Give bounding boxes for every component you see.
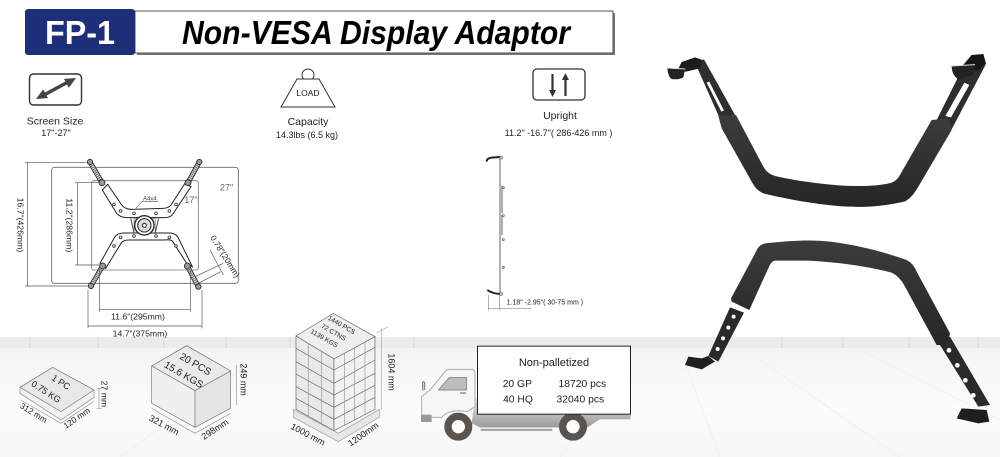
14.7 inch label: 14.7"(375mm): [113, 329, 167, 339]
pallet stack: [289, 313, 396, 448]
shipping quantity table: 20 GP: [503, 379, 532, 390]
main band: [718, 115, 952, 207]
right leg: [940, 337, 990, 407]
left clip: [667, 57, 703, 79]
model badge: [25, 9, 135, 55]
carton: 15.6 KGS: [162, 360, 205, 391]
shipping quantity table: 32040 pcs: [556, 395, 604, 406]
value: upright: 11.2" -16.7"( 286-426 mm ): [505, 128, 612, 138]
single unit box: 27 mm: [99, 381, 109, 407]
right arm: [937, 64, 986, 129]
single unit box: 120 mm: [61, 405, 92, 431]
shipping quantity table: [477, 346, 630, 414]
right clip: [952, 54, 986, 79]
11.6 inch label: 11.6"(295mm): [111, 311, 165, 321]
truck and container table: [421, 346, 631, 437]
main band: [731, 240, 950, 345]
pallet stack: 1604 mm: [386, 353, 396, 391]
single unit box: 1 PC: [50, 373, 73, 392]
single unit box: 312 mm: [18, 401, 49, 425]
floor background: [0, 337, 1000, 457]
pallet stack: 1200mm: [346, 420, 380, 448]
label: screen size: Screen Size: [27, 116, 83, 128]
packaging and shipping: [18, 313, 396, 448]
product photo: lower bracket: [685, 240, 990, 423]
label: upright: Upright: [543, 110, 577, 122]
shipping quantity table: Non-palletized: [519, 357, 589, 369]
product photo: upper bracket: [667, 54, 986, 207]
pallet stack: 72 CTNS: [320, 323, 347, 343]
bracket end knobs: [87, 159, 202, 289]
pallet stack: 1000 mm: [289, 421, 327, 448]
label: capacity: Capacity: [288, 116, 329, 128]
27 inch outline: [52, 167, 238, 283]
truck: [421, 369, 631, 437]
spec: capacity: [276, 69, 338, 140]
icon: load weight: LOAD: [296, 88, 320, 98]
carton: 249 mm: [239, 363, 249, 396]
carton: 298mm: [200, 417, 230, 442]
icon: up and down arrows: [533, 69, 585, 100]
single unit box: [18, 367, 109, 431]
icon: diagonal double arrow: [30, 74, 82, 105]
shipping quantity table: 18720 pcs: [558, 379, 606, 390]
value: capacity: 14.3lbs (6.5 kg): [276, 130, 338, 140]
size labels: 17": [184, 195, 198, 205]
front dimension drawing: [15, 159, 242, 339]
side bracket: [487, 156, 532, 311]
carton: [147, 346, 249, 442]
bracket holes: [113, 203, 177, 247]
single unit box: 0.75 KG: [30, 379, 63, 405]
size labels: [184, 183, 233, 205]
title text: Non-VESA Display Adaptor: [182, 14, 572, 51]
right foot: [957, 408, 989, 423]
16.7 inch label: 16.7"(426mm): [15, 198, 25, 252]
side profile drawing: [487, 156, 583, 311]
carton: 20 PCS: [177, 351, 213, 378]
spec: upright: [505, 69, 612, 138]
left slot: [707, 82, 724, 112]
17 inch outline: [92, 181, 198, 270]
carton: 321 mm: [147, 413, 181, 437]
dimension lines: [25, 162, 223, 328]
value: screen size: 17"-27": [41, 128, 71, 138]
left leg: [708, 307, 744, 362]
A4x4 label: A4x4: [143, 197, 157, 203]
title banner: [25, 9, 615, 55]
pallet stack: 1440 PCS: [326, 315, 357, 337]
leg holes: [716, 315, 976, 398]
0.78 inch label: 0.78"(20mm): [208, 233, 242, 279]
right slot: [945, 83, 969, 117]
pallet stack: 1139 KGS: [309, 328, 339, 350]
shipping quantity table: 40 HQ: [503, 395, 533, 406]
left arm: [695, 59, 735, 117]
offset label: 1.18" -2.95"( 30-75 mm ): [507, 299, 583, 306]
11.2 inch label: 11.2"(286mm): [65, 198, 75, 252]
spec: screen size: [27, 74, 83, 138]
left foot: [685, 356, 715, 369]
bracket line drawing: [90, 162, 199, 287]
size labels: 27": [220, 183, 233, 193]
model badge: FP-1: [45, 14, 115, 51]
